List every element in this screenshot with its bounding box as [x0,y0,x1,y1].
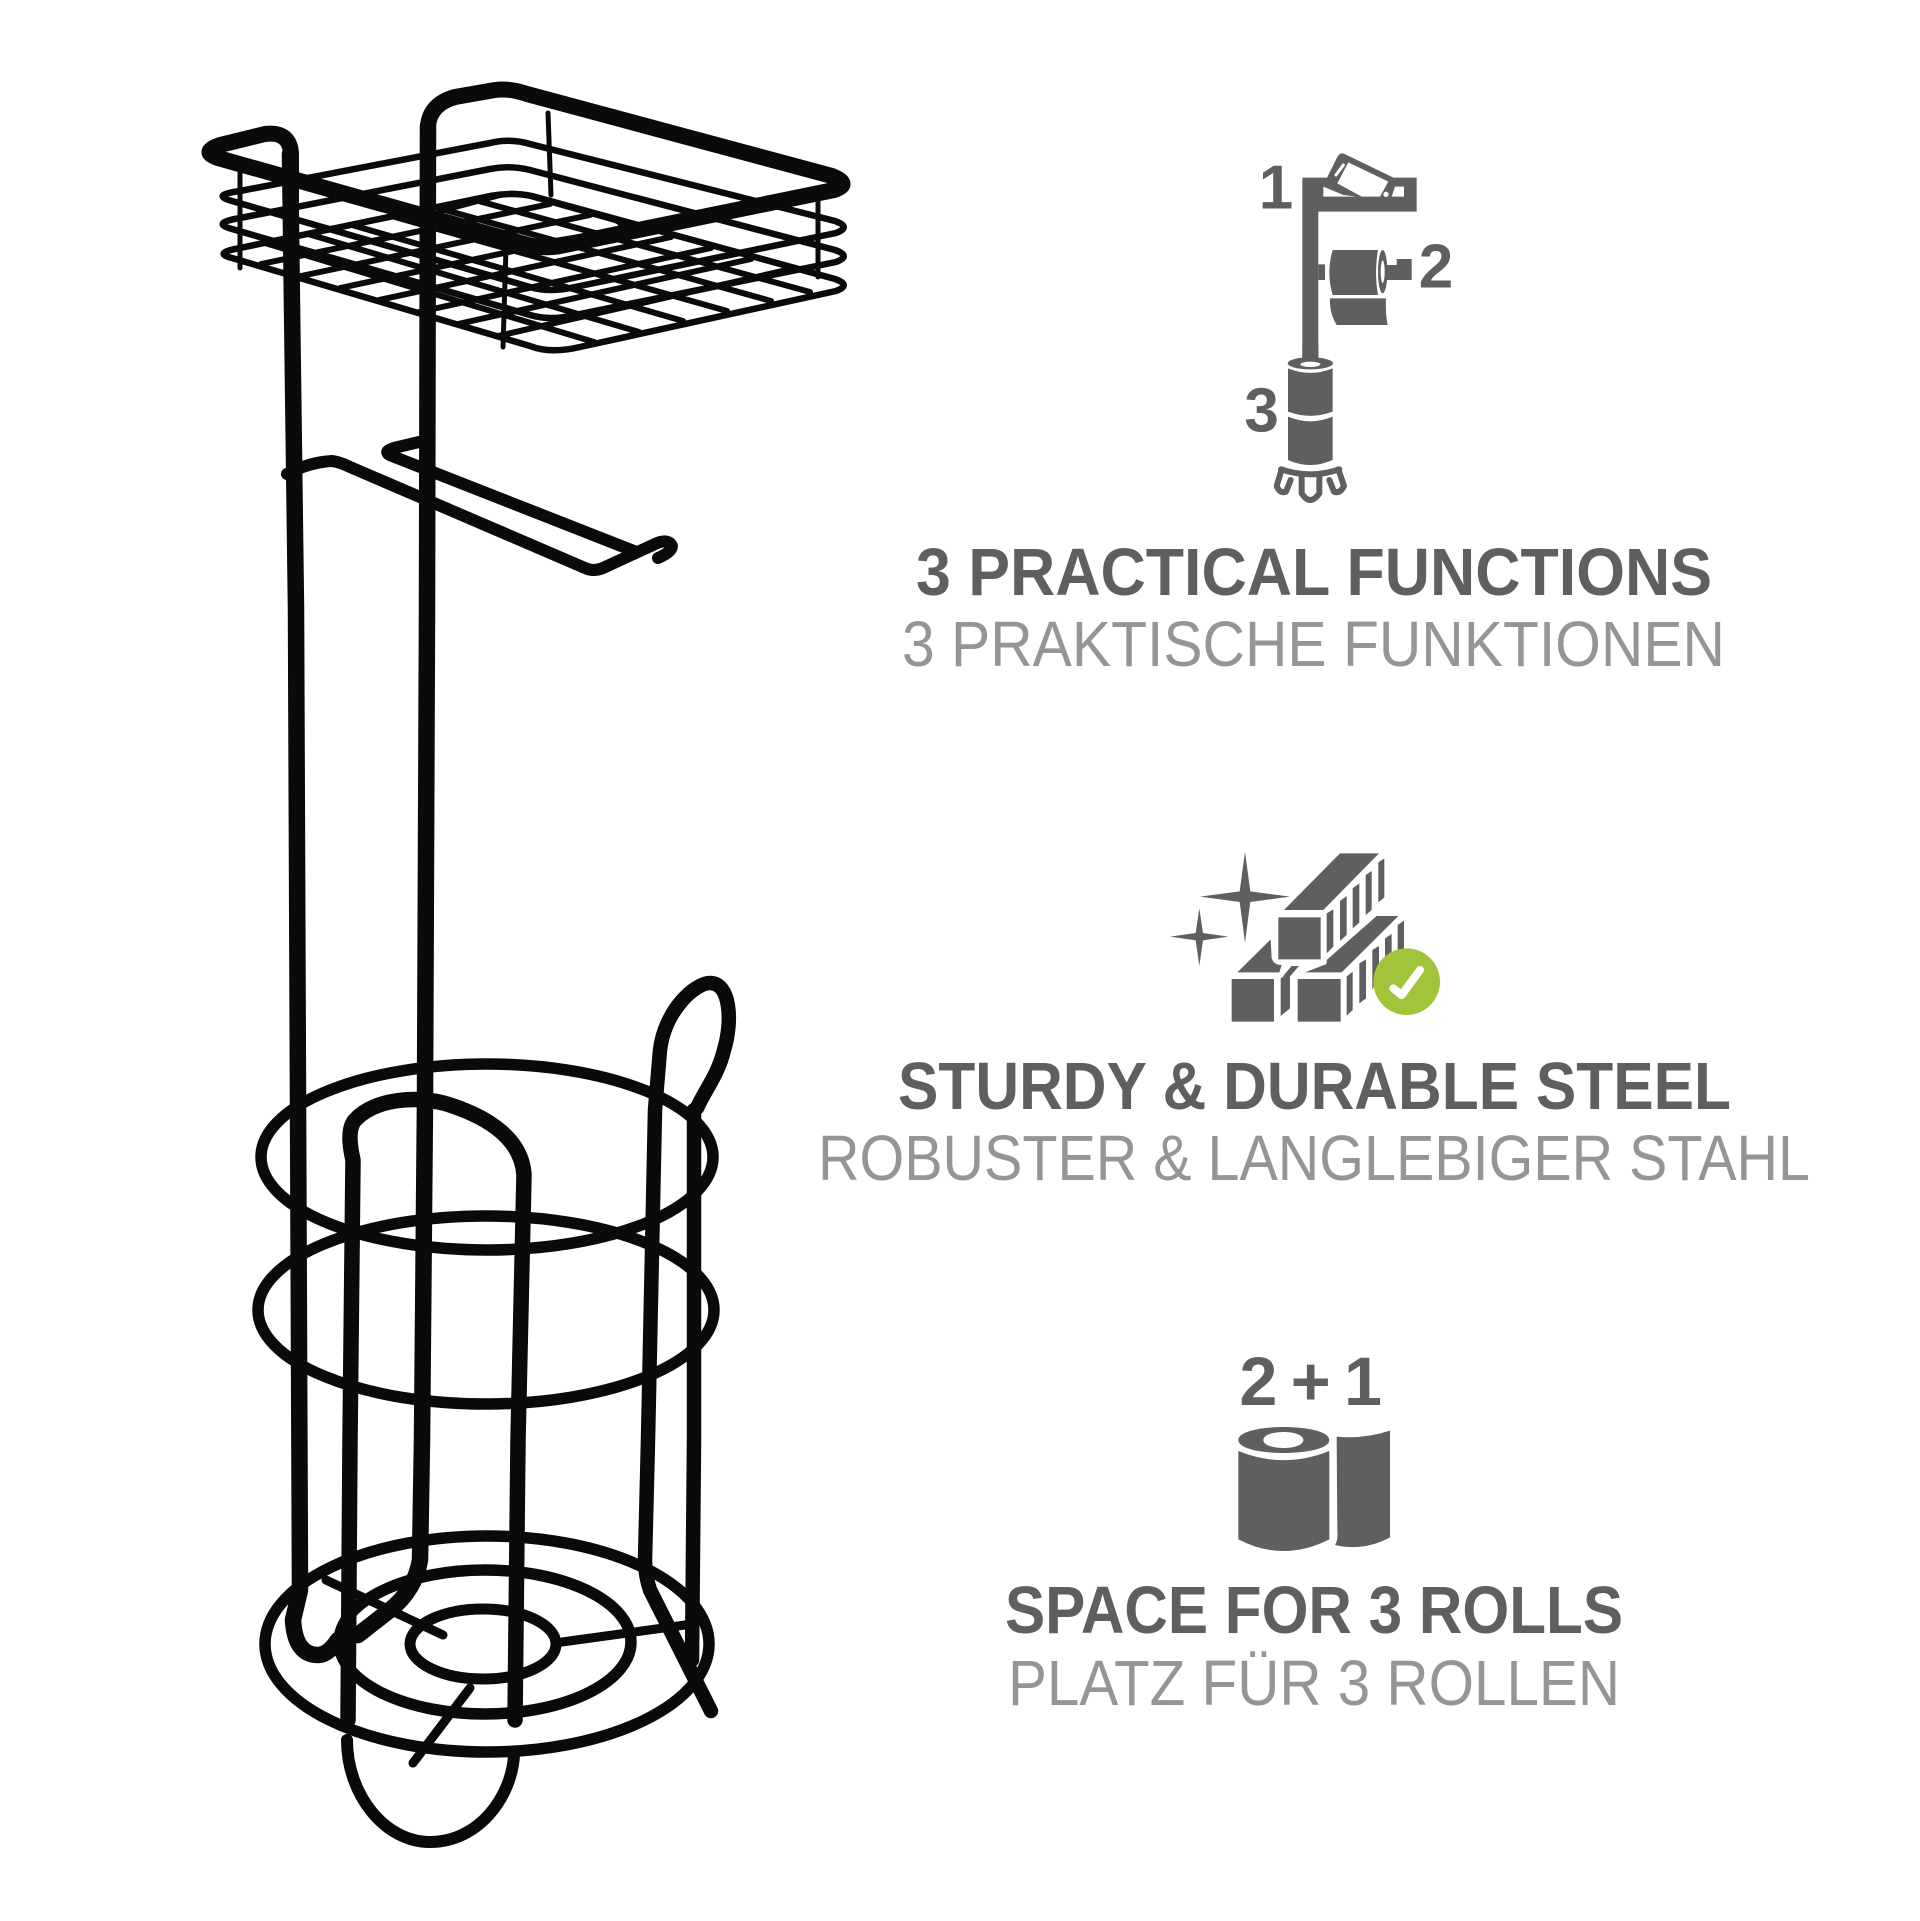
feature 1: German subheading: 3 PRAKTISCHE FUNKTIONEN [902,608,1725,680]
base rings and spokes [265,1536,709,1763]
feature 2: German subheading: ROBUSTER & LANGLEBIGER STAHL [818,1122,1810,1194]
icon numerals [1244,154,1453,446]
feature 3: German subheading: PLATZ FÜR 3 ROLLEN [1008,1647,1620,1719]
feature 3: icon [1238,1344,1390,1551]
icon: paper towel roll [1335,1431,1390,1547]
icon: 2 + 1 label: 2 + 1 [1239,1344,1382,1420]
front arch and handle [347,983,729,1842]
icon: toilet roll on arm [1318,250,1412,325]
lower rings [258,1064,714,1404]
icon numerals: 2 [1419,232,1453,301]
basket floor grid [261,194,810,342]
icon: spare rolls and brush base [1277,343,1344,500]
feature 1: heading: 3 PRACTICAL FUNCTIONS [916,535,1712,610]
thick basket rim [209,90,843,247]
feature 2: icon [1170,852,1440,1022]
roll holder arms [287,442,672,570]
basket side wires [223,113,844,350]
feature 2: heading: STURDY & DURABLE STEEL [898,1049,1731,1124]
feature 1: icon [1244,153,1453,500]
icon: sparkles [1170,852,1290,966]
icon: green check badge [1373,948,1440,1015]
icon numerals: 3 [1244,377,1279,446]
icon: stand frame [1302,178,1417,360]
icon: phone on shelf [1327,153,1395,198]
icon: toilet roll [1238,1427,1329,1551]
rear uprights [290,126,428,1655]
product photo: black wire toilet roll stand [209,90,844,1842]
feature 3: heading: SPACE FOR 3 ROLLS [1005,1573,1623,1648]
icon numerals: 1 [1259,154,1293,223]
icon: steel bars [1232,853,1404,1022]
